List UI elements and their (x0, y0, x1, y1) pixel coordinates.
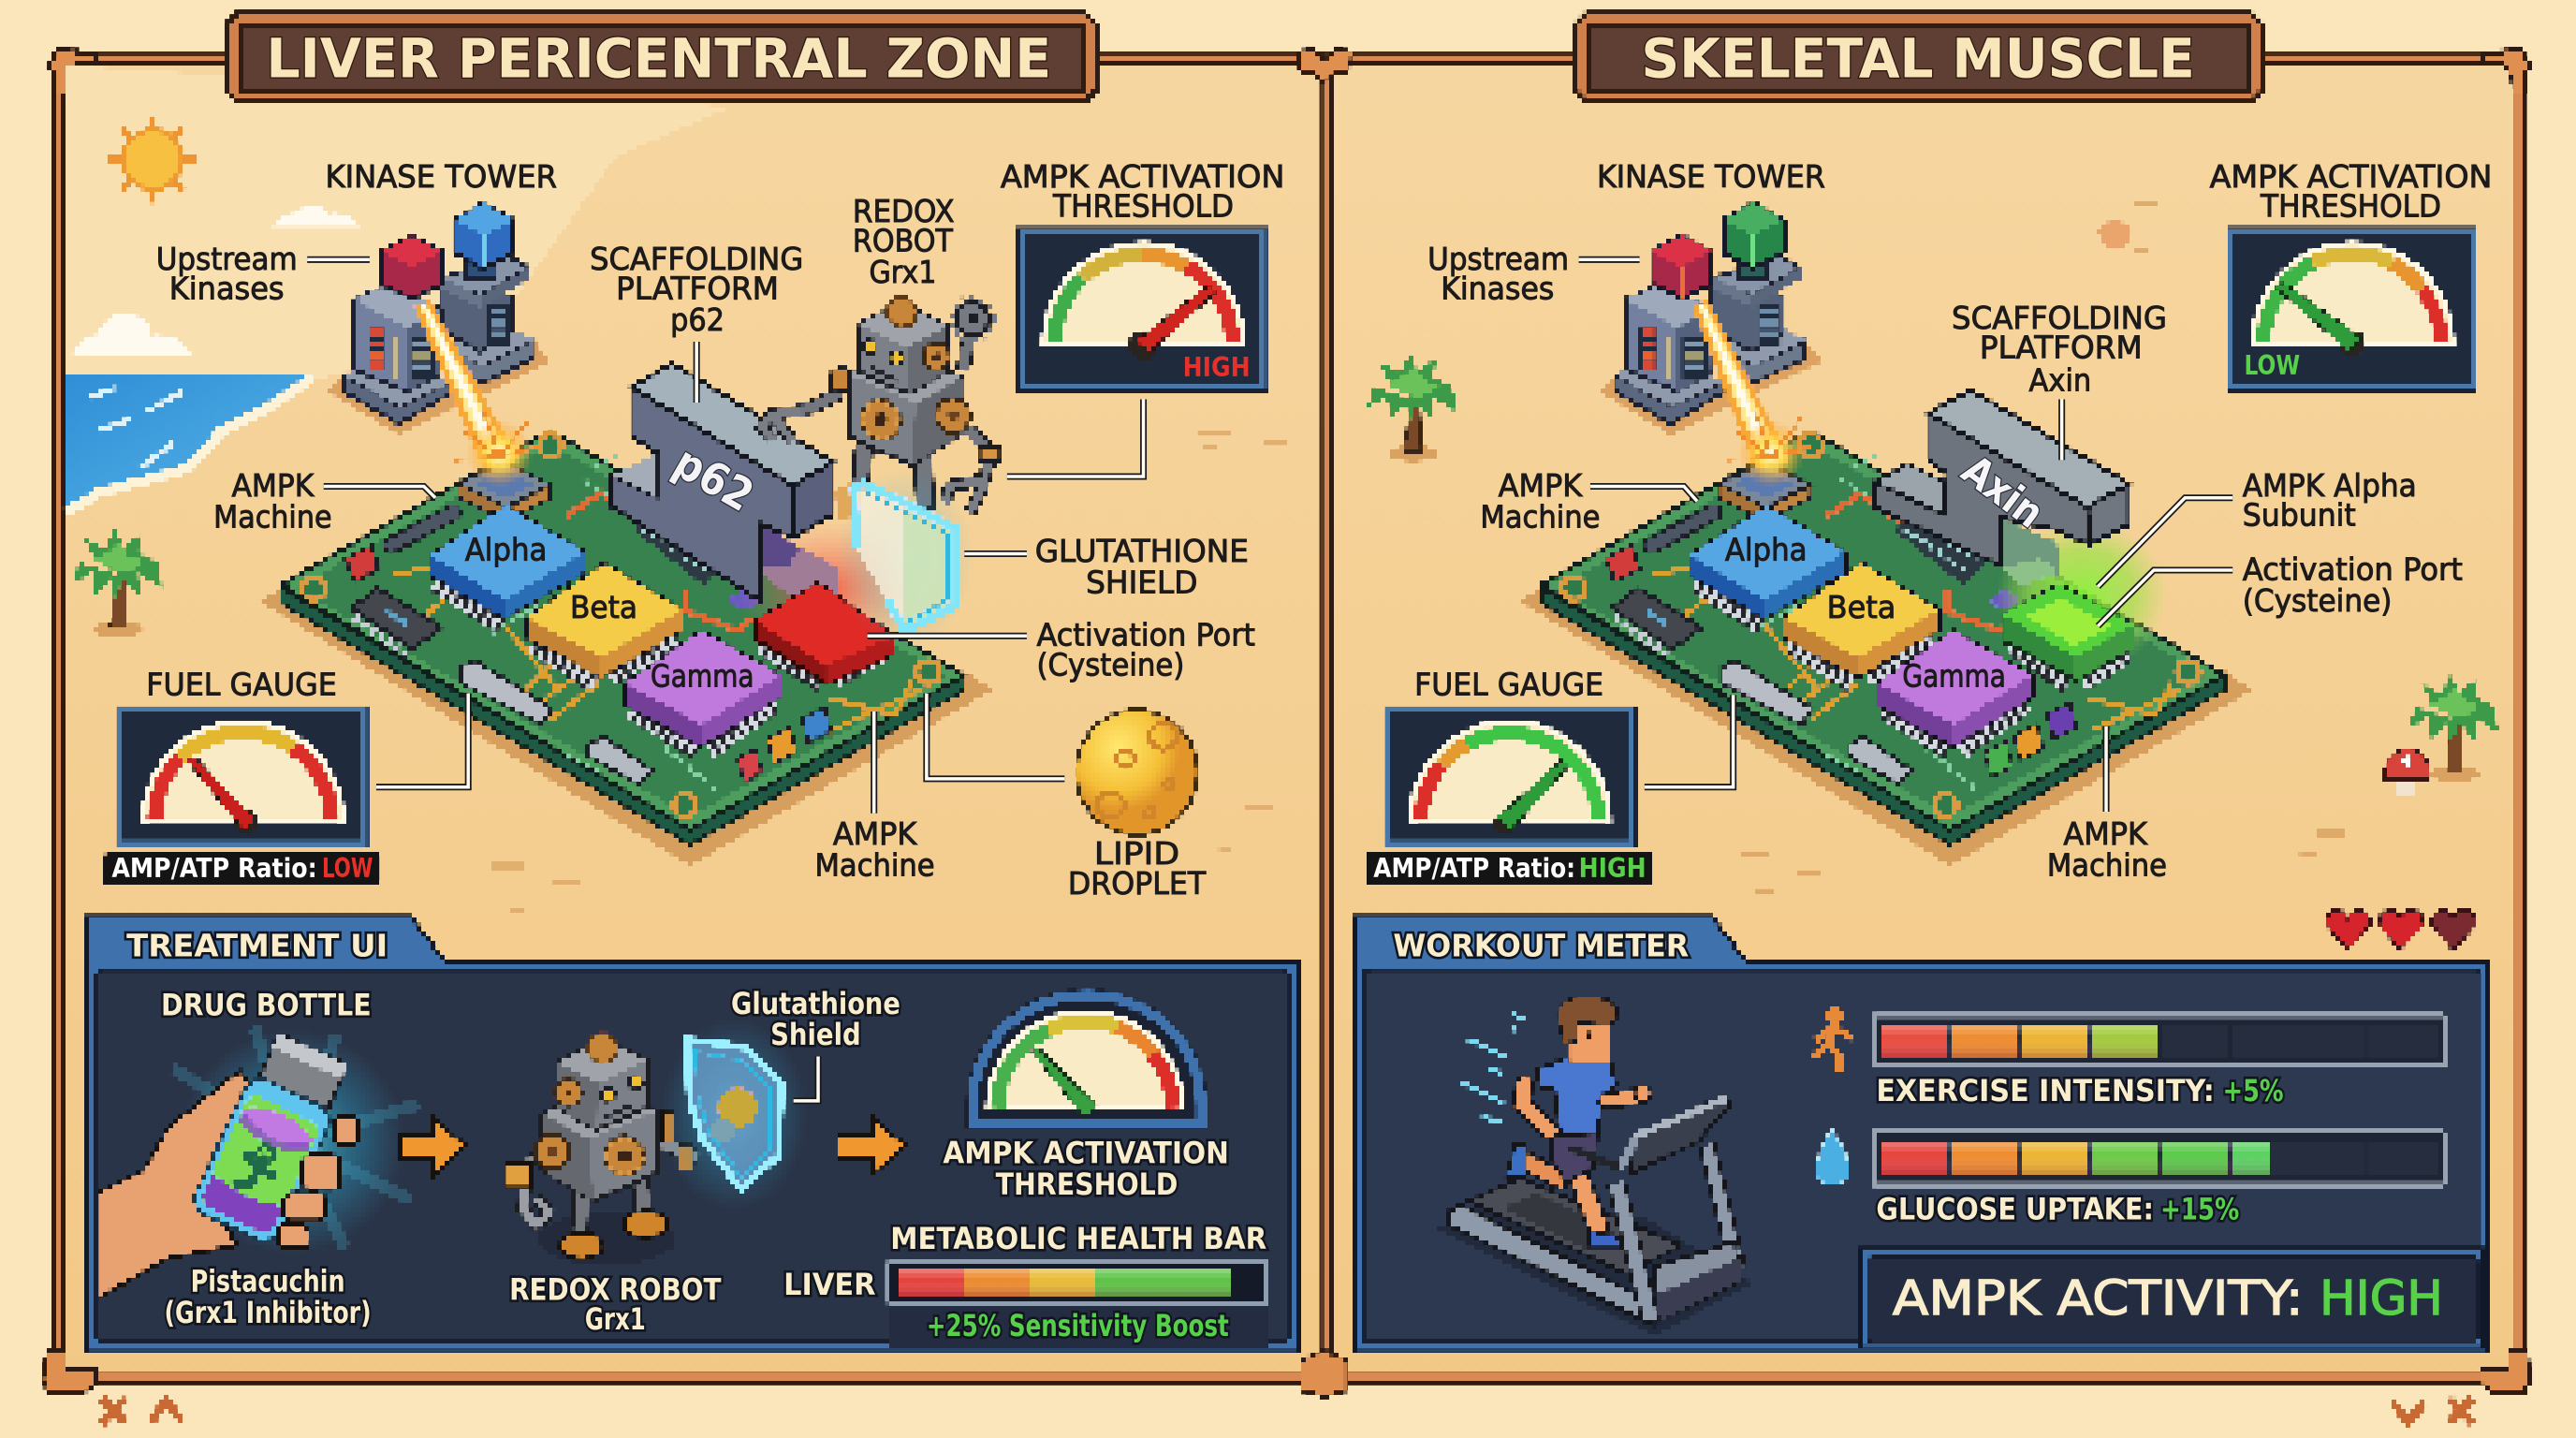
icon: glutathione shield lower (662, 1019, 807, 1210)
circuit board: AMPK machine (1519, 431, 2252, 866)
label: glucose uptake: +15% (2160, 1193, 2239, 1226)
laser beam (1692, 301, 1810, 487)
label: redox robot lower (509, 1273, 722, 1337)
label: AMPK activation threshold: THRESHOLD (1052, 188, 1234, 225)
panel title plaque (227, 13, 1096, 102)
icon: glutathione shield (836, 466, 974, 651)
label: redox robot lower: Grx1 (585, 1303, 646, 1337)
AMP/ATP ratio low text: LOW (322, 853, 373, 884)
label: upstream kinases: Upstream (156, 241, 298, 277)
panel frame: liver (43, 48, 1354, 1397)
upstream kinase cube: red (382, 236, 442, 299)
axin block lettering: Axin (1953, 447, 2053, 537)
label: exercise intensity: EXERCISE INTENSITY: (1876, 1075, 2215, 1108)
gauge: fuel gauge high (1385, 707, 1634, 846)
label: upstream kinases (1427, 241, 1569, 306)
gauge: AMPK activation threshold high (1018, 228, 1266, 391)
title: liver pericentral zone: LIVER PERICENTRAL ZONE (266, 26, 1051, 90)
icon: drug bottle held in hand (98, 1027, 419, 1299)
arm: lower claw (944, 427, 1001, 513)
arm: raised with gear (951, 298, 994, 372)
treadmill (1435, 1095, 1753, 1336)
label: glucose uptake: GLUCOSE UPTAKE: (1876, 1193, 2154, 1226)
AMP/ATP ratio high text: HIGH (1579, 853, 1647, 884)
footer icons (102, 1399, 2472, 1423)
icon: sun (109, 115, 198, 204)
label: lipid droplet: LIPID (1094, 835, 1179, 872)
label: upstream kinases: Kinases (1441, 270, 1554, 306)
label: AMPK machine lower: AMPK (833, 815, 917, 852)
sea (66, 376, 312, 513)
label: lipid droplet (1068, 835, 1207, 902)
label: liver: LIVER (783, 1269, 875, 1302)
label: scaffolding platform: SCAFFOLDING (1952, 300, 2167, 336)
label: lipid droplet: DROPLET (1068, 865, 1207, 902)
label: activation port (1036, 617, 1255, 682)
gauge: treatment threshold (966, 989, 1208, 1131)
label: glutathione shield lower: Shield (770, 1019, 861, 1052)
badge: AMP/ATP ratio (104, 853, 381, 886)
kinase tower (327, 203, 550, 435)
badge: AMP/ATP ratio (1365, 853, 1653, 886)
label: scaffolding platform: SCAFFOLDING (590, 241, 803, 277)
icon: hearts (2326, 910, 2476, 949)
labels: liver panel (111, 158, 1284, 1343)
red glow (739, 520, 920, 657)
label: AMPK machine upper: AMPK (1499, 467, 1583, 504)
chip: beta (1784, 564, 1939, 683)
upstream kinase cube: blue (454, 203, 513, 279)
label: glutathione shield: SHIELD (1086, 565, 1197, 601)
gauge reading: high: HIGH (1183, 352, 1251, 383)
label: AMPK activation threshold (1001, 158, 1284, 225)
label: pistacuchin (165, 1266, 372, 1330)
label: activation threshold lower (943, 1137, 1229, 1202)
label: upstream kinases: Kinases (169, 270, 285, 306)
redox robot lower (506, 1034, 698, 1265)
treadmill runner (1435, 997, 1753, 1336)
label: activation threshold lower: THRESHOLD (996, 1168, 1178, 1202)
sand specks (493, 431, 1288, 914)
title: skeletal muscle: SKELETAL MUSCLE (1641, 26, 2195, 90)
label: activation port: Activation Port (2243, 551, 2463, 588)
speed lines (1462, 1014, 1524, 1123)
label: upstream kinases (156, 241, 298, 306)
label: scaffolding platform: PLATFORM (616, 270, 779, 306)
sand specks (1741, 200, 2346, 892)
label: kinase tower: KINASE TOWER (326, 158, 557, 195)
intensity bar (1873, 1016, 2445, 1066)
readout: AMPK activity high: HIGH (2320, 1271, 2443, 1327)
label: AMPK activation threshold: AMPK ACTIVATION (1001, 158, 1284, 195)
laser beam (414, 301, 539, 487)
small components (1984, 703, 2076, 777)
label: redox robot: Grx1 (869, 254, 936, 290)
redox robot grx1 (762, 298, 1001, 522)
panel title plaque (1575, 13, 2262, 102)
AMP/ATP ratio low text: AMP/ATP Ratio: (111, 853, 317, 884)
label: activation port: (Cysteine) (2243, 582, 2392, 619)
chip text: beta: Beta (570, 589, 637, 625)
label: pistacuchin: (Grx1 Inhibitor) (165, 1297, 372, 1330)
icon: lipid droplet (1076, 710, 1197, 835)
chip: gamma (1878, 631, 2032, 751)
label: AMPK machine lower: Machine (2047, 846, 2167, 883)
label: kinase tower: KINASE TOWER (1597, 158, 1825, 195)
label: activation port: (Cysteine) (1036, 646, 1184, 682)
p62 block lettering: p62 (665, 436, 762, 522)
label: AMPK activation threshold: THRESHOLD (2260, 188, 2441, 225)
label: AMPK alpha subunit: AMPK Alpha (2243, 467, 2417, 504)
label: AMPK machine lower (815, 815, 935, 883)
arrow: bottle to robot (399, 1117, 465, 1175)
label: activation threshold lower: AMPK ACTIVATION (943, 1137, 1229, 1171)
AMP/ATP ratio high text: AMP/ATP Ratio: (1373, 853, 1575, 884)
label: glutathione shield: GLUTATHIONE (1035, 533, 1249, 569)
label: scaffolding platform: Axin (2029, 362, 2091, 399)
label: AMPK activation threshold (2210, 158, 2492, 225)
readout: AMPK activity high: AMPK ACTIVITY: (1893, 1271, 2304, 1327)
gauge: fuel gauge low (117, 707, 368, 846)
icon: water drop (1815, 1129, 1850, 1184)
label: glutathione shield (1035, 533, 1249, 601)
chip: activation port green (2003, 585, 2134, 685)
readout: AMPK activity high (1893, 1271, 2443, 1327)
kinase tower (1599, 203, 1822, 435)
workout panel box (1355, 917, 2489, 1352)
palm tree (72, 529, 163, 638)
scaffolding platform p62 (611, 363, 836, 608)
label: AMPK machine lower: AMPK (2063, 815, 2148, 852)
icon: runner (1812, 1010, 1853, 1073)
palm tree left (1367, 353, 1457, 462)
circuit board: AMPK machine (259, 431, 992, 866)
green glow (1998, 520, 2169, 670)
chip: activation port red cysteine (755, 583, 894, 683)
label: fuel gauge: FUEL GAUGE (146, 666, 337, 702)
leader lines: liver (307, 259, 1144, 1101)
label: activation port: Activation Port (1036, 617, 1255, 653)
label: scaffolding platform: PLATFORM (1980, 330, 2143, 366)
label: AMPK machine lower (2047, 815, 2167, 883)
gauge: AMPK activation threshold low (2228, 228, 2476, 391)
label: AMPK machine upper: Machine (1480, 498, 1600, 535)
label: redox robot: REDOX (853, 193, 955, 229)
label: drug bottle: DRUG BOTTLE (161, 990, 372, 1023)
heading: workout meter: WORKOUT METER (1393, 927, 1689, 963)
labels: muscle panel (1373, 158, 2492, 1327)
chip text: gamma: Gamma (1902, 658, 2006, 695)
icon: mushroom (2384, 749, 2430, 795)
upstream kinase cube: red (1652, 236, 1712, 299)
label: activation port (2243, 551, 2463, 619)
leader lines: muscle (1579, 259, 2232, 812)
chip text: alpha: Alpha (1725, 531, 1808, 567)
panel: liver pericentral zone (43, 13, 1354, 1397)
gauge reading: low: LOW (2244, 350, 2300, 381)
AMPK activity box (1860, 1249, 2484, 1347)
label: exercise intensity: +5% (2223, 1075, 2284, 1108)
label: upstream kinases: Upstream (1427, 241, 1569, 277)
chip: alpha (1690, 506, 1845, 626)
glucose bar (1873, 1132, 2445, 1184)
label: scaffolding platform (590, 241, 803, 338)
chip text: alpha: Alpha (465, 531, 547, 567)
chip: gamma (626, 631, 781, 751)
heading: treatment UI: TREATMENT UI (126, 927, 388, 963)
small components (738, 707, 831, 782)
metabolic health bar (889, 1260, 1266, 1305)
treatment panel box (87, 917, 1298, 1352)
clouds (72, 205, 359, 355)
arrow: robot to gauge (838, 1117, 905, 1175)
label: scaffolding platform (1952, 300, 2167, 399)
chip: alpha (431, 506, 585, 626)
label: glutathione shield lower: Glutathione (731, 988, 900, 1021)
label: redox robot: ROBOT (853, 223, 954, 259)
chip: beta (527, 564, 681, 683)
scaffolding platform axin (1875, 390, 2130, 587)
label: AMPK alpha subunit: Subunit (2243, 497, 2356, 534)
label: AMPK activation threshold: AMPK ACTIVATION (2210, 158, 2492, 195)
label: pistacuchin: Pistacuchin (191, 1266, 345, 1299)
upstream kinase cube: green (1723, 203, 1784, 279)
light sand and sky (66, 66, 731, 381)
arm: left with clamp (762, 368, 853, 440)
label: fuel gauge: FUEL GAUGE (1414, 666, 1603, 702)
label: AMPK machine upper (1480, 467, 1600, 535)
runner (1506, 997, 1651, 1249)
label: AMPK machine upper (213, 467, 332, 535)
label: AMPK alpha subunit (2243, 467, 2417, 534)
chip text: beta: Beta (1827, 589, 1895, 625)
label: AMPK machine upper: AMPK (231, 467, 315, 504)
palm tree right (2408, 674, 2499, 782)
chip text: gamma: Gamma (651, 658, 754, 695)
panel frame: muscle (1298, 48, 2530, 1397)
label: AMPK machine lower: Machine (815, 846, 935, 883)
label: metabolic health bar: METABOLIC HEALTH BAR (890, 1223, 1266, 1256)
label: redox robot lower: REDOX ROBOT (509, 1273, 722, 1307)
label: AMPK machine upper: Machine (213, 498, 332, 535)
sensitivity boost value: +25% Sensitivity Boost (927, 1310, 1229, 1343)
label: redox robot (853, 193, 955, 290)
label: glutathione shield lower (731, 988, 900, 1052)
label: scaffolding platform: p62 (670, 301, 724, 338)
